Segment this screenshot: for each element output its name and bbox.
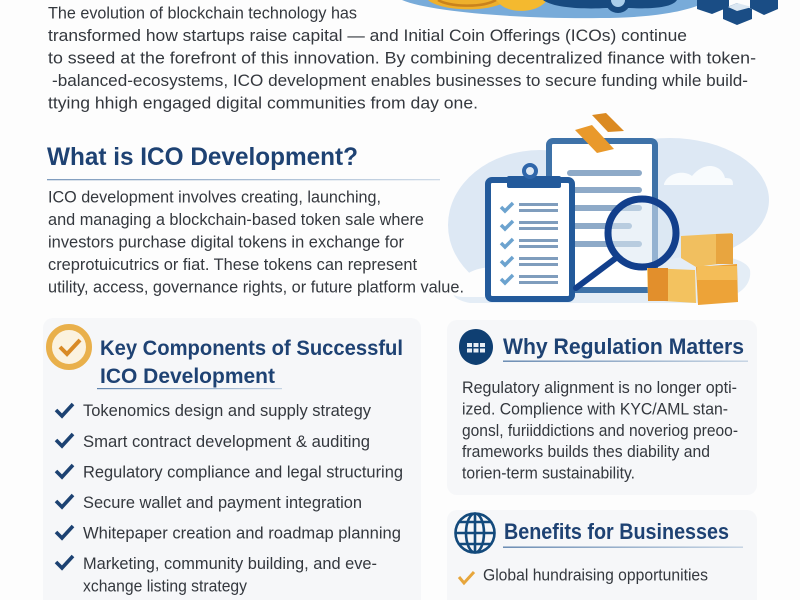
definition paragraph: utility, access, governance rights, or future platform value. <box>48 278 464 296</box>
icon: navy badge <box>459 329 493 365</box>
panel: why regulation matters <box>447 320 757 495</box>
checklist: Tokenomics design and supply strategy <box>83 402 372 420</box>
intro text block <box>48 4 756 112</box>
benefit item: Global hundraising opportunities <box>483 566 708 584</box>
regulation paragraph: ized. Complience with KYC/AML stan- <box>462 400 728 418</box>
checklist: Marketing, community building, and eve- <box>83 555 377 573</box>
front clipboard <box>488 165 572 299</box>
intro text block: transformed how startups raise capital — and Initial Coin Offerings (ICOs) continue <box>48 27 687 45</box>
panel heading: Why Regulation Matters <box>503 334 744 359</box>
back document <box>549 141 655 290</box>
magnifier <box>576 199 676 288</box>
panel: key components <box>43 318 421 600</box>
regulation paragraph: Regulatory alignment is no longer opti- <box>462 379 737 397</box>
panel heading: ICO Development <box>100 364 275 388</box>
checklist: xchange listing strategy <box>83 578 248 596</box>
regulation paragraph: torien-term sustainability. <box>462 464 635 482</box>
cardboard boxes <box>647 233 738 305</box>
checklist: Whitepaper creation and roadmap planning <box>83 524 401 542</box>
intro text block: ttying hhigh engaged digital communities from day one. <box>48 94 478 112</box>
definition paragraph: investors purchase digital tokens in exchange for <box>48 234 404 252</box>
orange clips <box>575 113 624 153</box>
definition paragraph: creprotuicutrics or fiat. These tokens can represent <box>48 256 417 274</box>
icon: gold check badge <box>49 327 89 367</box>
panel heading <box>97 336 403 389</box>
checklist <box>56 402 403 596</box>
checklist: Smart contract development & auditing <box>83 433 370 451</box>
intro text block: to sseed at the forefront of this innovation. By combining decentralized finance with token- <box>48 50 756 68</box>
regulation paragraph: frameworks builds thes diability and <box>462 443 710 461</box>
definition paragraph: ICO development involves creating, launching, <box>48 188 381 206</box>
checklist: Secure wallet and payment integration <box>83 494 362 512</box>
heading: What is ICO Development: What is ICO Development? <box>47 143 358 171</box>
intro text block: -balanced-ecosystems, ICO development enables businesses to secure funding while build- <box>52 72 748 90</box>
panel heading: Benefits for Businesses <box>504 519 729 544</box>
illustration: clipboard, document, magnifier and boxes <box>448 113 769 305</box>
panel: benefits for businesses <box>447 510 757 600</box>
top illustration: coins, vehicle and blocks <box>402 0 778 25</box>
intro text block: The evolution of blockchain technology has <box>48 4 357 22</box>
regulation paragraph: gonsl, furiiddictions and noveriog preoo- <box>462 422 738 440</box>
checklist: Regulatory compliance and legal structuring <box>83 464 403 482</box>
panel heading: Key Components of Successful <box>100 336 403 360</box>
definition paragraph <box>48 188 464 296</box>
icon: globe <box>456 514 494 552</box>
regulation paragraph <box>462 379 738 482</box>
definition paragraph: and managing a blockchain-based token sale where <box>48 211 424 229</box>
